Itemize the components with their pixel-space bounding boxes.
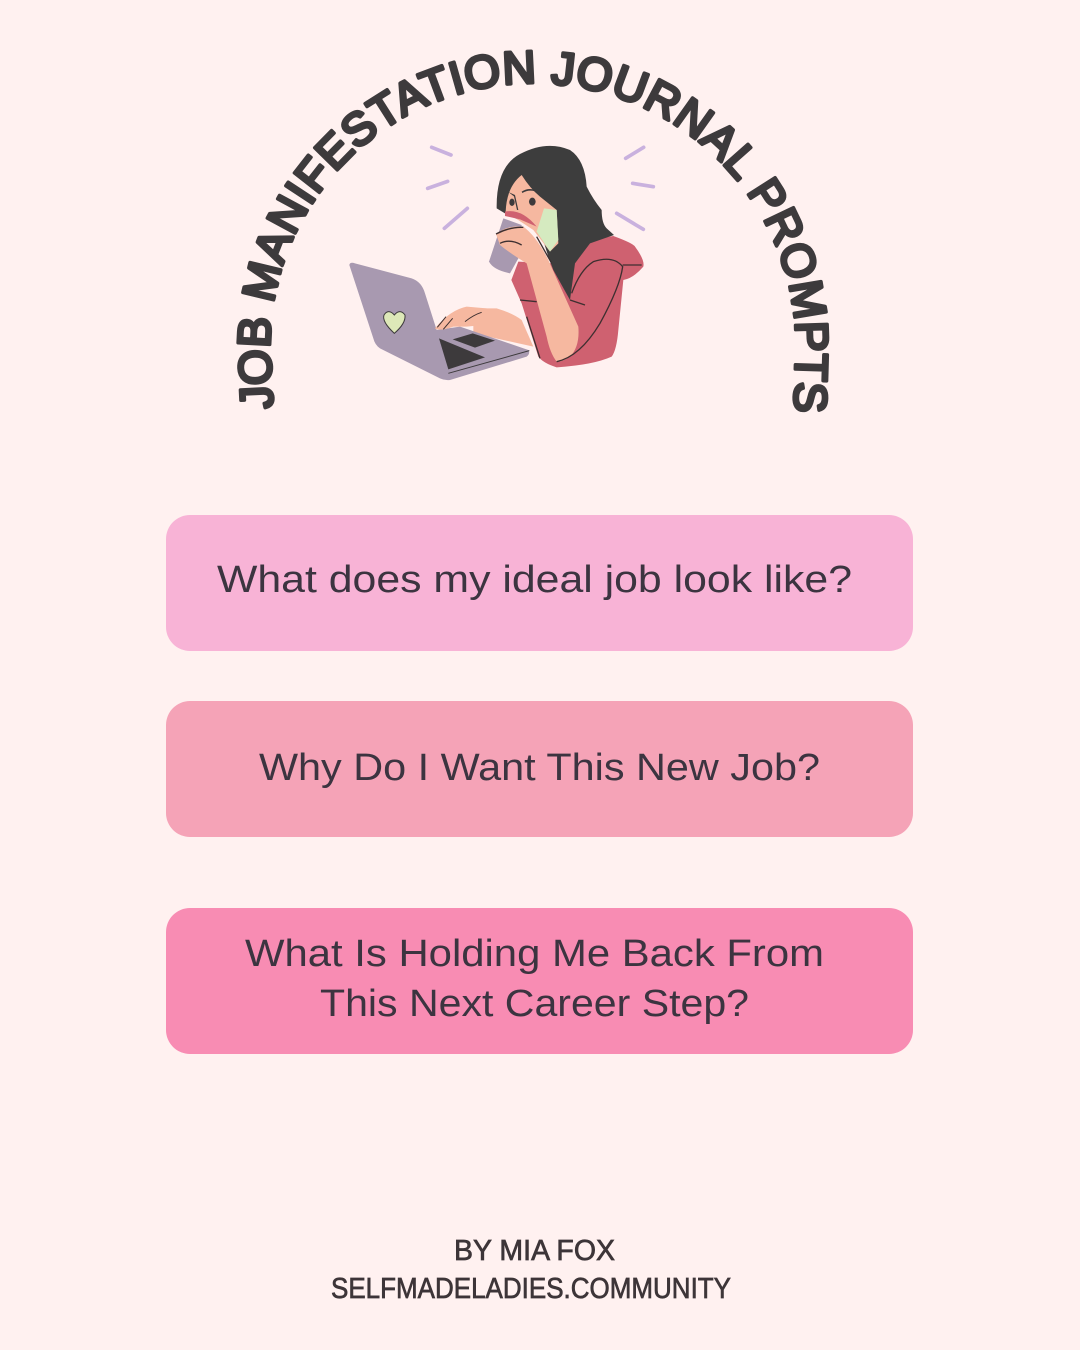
cup rim [505,211,537,227]
card: why new job [166,701,913,837]
card: why new job: Why Do I Want This New Job? [259,747,820,789]
finger lines [437,312,482,329]
hair [497,146,614,300]
shirt [511,236,644,367]
laptop [349,263,529,380]
face [506,175,558,252]
icon: purple rays [428,147,653,229]
card: holding me back: This Next Career Step? [320,983,749,1025]
eyes and brows [508,189,536,210]
card: ideal job [166,515,913,651]
illustration: woman drinking coffee at laptop [349,146,653,380]
raised arm [496,226,579,362]
footer credit: SELFMADELADIES.COMMUNITY [331,1273,731,1305]
card: ideal job: What does my ideal job look like? [217,559,852,601]
arm and shirt outlines [496,227,642,362]
card: holding me back [166,908,913,1054]
footer credit [331,1235,731,1305]
face mask [537,208,558,252]
card: holding me back: What Is Holding Me Back From [245,933,824,975]
title: curved heading: JOB MANIFESTATION JOURNAL PROMPTS [236,50,830,412]
lower arm [473,308,533,347]
icon: heart [384,312,405,333]
footer credit: BY MIA FOX [454,1235,615,1267]
trackpad [453,333,495,348]
cup [489,218,522,273]
laptop screen [439,338,485,369]
laptop edge [448,351,529,373]
hand on laptop [435,307,487,330]
